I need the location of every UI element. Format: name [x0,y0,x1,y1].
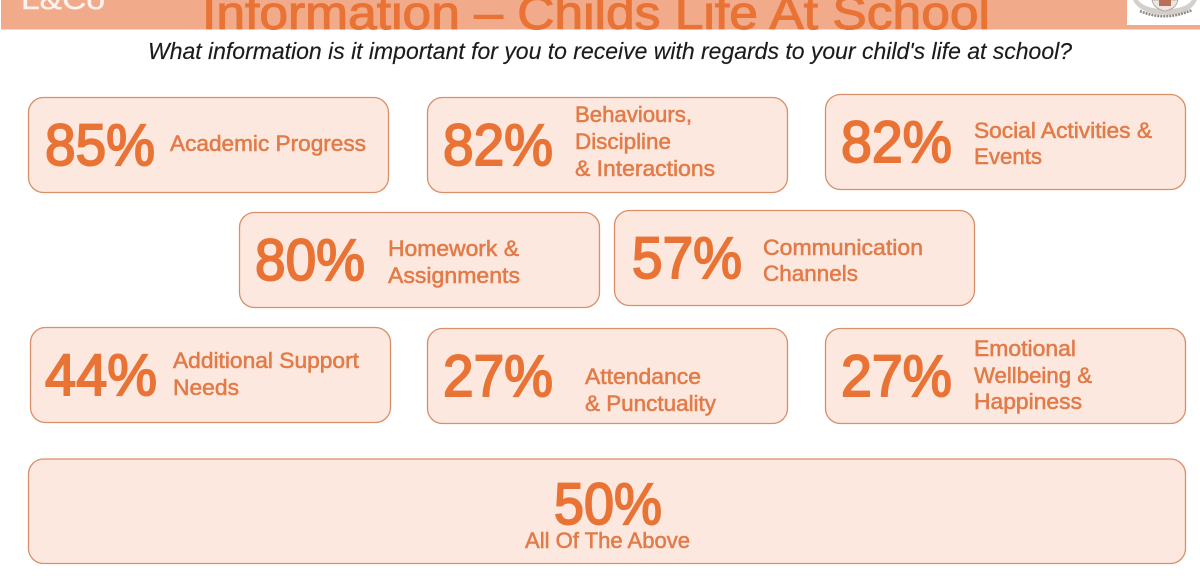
card: Additional Support Needs 44% [30,328,390,422]
card: Additional Support Needs 44%: 44% [45,343,157,408]
card: Behaviours, Discipline & Interactions 82% [428,98,788,192]
card: Attendance & Punctuality 27%: & Punctuality [585,391,716,416]
card: Additional Support Needs 44%: Additional Support [173,348,359,373]
card: Homework & Assignments 80%: Homework & [388,236,519,261]
card: Communication Channels 57%: Channels [763,261,858,286]
card: Behaviours, Discipline & Interactions 82%: 82% [443,113,553,178]
card: Attendance & Punctuality 27% [428,328,788,424]
card: Behaviours, Discipline & Interactions 82%: Discipline [575,129,671,154]
card: Communication Channels 57%: 57% [632,226,742,291]
card: Academic Progress 85%: 85% [45,113,155,178]
card: Additional Support Needs 44%: Needs [173,375,239,400]
card: Emotional Wellbeing & Happiness 27% [826,328,1186,424]
card: Emotional Wellbeing & Happiness 27%: 27% [841,344,952,409]
card: All Of The Above 50%: All Of The Above [525,528,690,553]
card: All Of The Above 50% [28,459,1186,564]
card: Attendance & Punctuality 27%: Attendance [585,364,701,389]
card: Behaviours, Discipline & Interactions 82%: & Interactions [575,156,715,181]
card: Social Activities & Events 82% [826,94,1186,190]
card: Emotional Wellbeing & Happiness 27%: Happiness [974,389,1082,414]
header band [1,0,1200,30]
card: Emotional Wellbeing & Happiness 27%: Emotional [974,336,1076,361]
card: Homework & Assignments 80%: 80% [255,228,365,293]
card: Communication Channels 57% [614,210,974,306]
card: Attendance & Punctuality 27%: 27% [443,344,553,409]
card: Homework & Assignments 80% [240,212,600,308]
card: Emotional Wellbeing & Happiness 27%: Wellbeing & [974,363,1092,388]
school crest logo [1127,0,1200,25]
card: All Of The Above 50%: 50% [554,472,662,537]
card: Homework & Assignments 80%: Assignments [388,263,520,288]
card: Behaviours, Discipline & Interactions 82%: Behaviours, [575,102,692,127]
card: Communication Channels 57%: Communication [763,235,923,260]
question subtitle: What information is it important for you to receive with regards to your child's life at school? [148,38,1072,64]
card: Social Activities & Events 82%: 82% [841,110,952,175]
card: Academic Progress 85%: Academic Progress [170,131,366,156]
card: Social Activities & Events 82%: Events [974,144,1042,169]
card: Social Activities & Events 82%: Social Activities & [974,118,1152,143]
card: Academic Progress 85% [28,98,388,192]
